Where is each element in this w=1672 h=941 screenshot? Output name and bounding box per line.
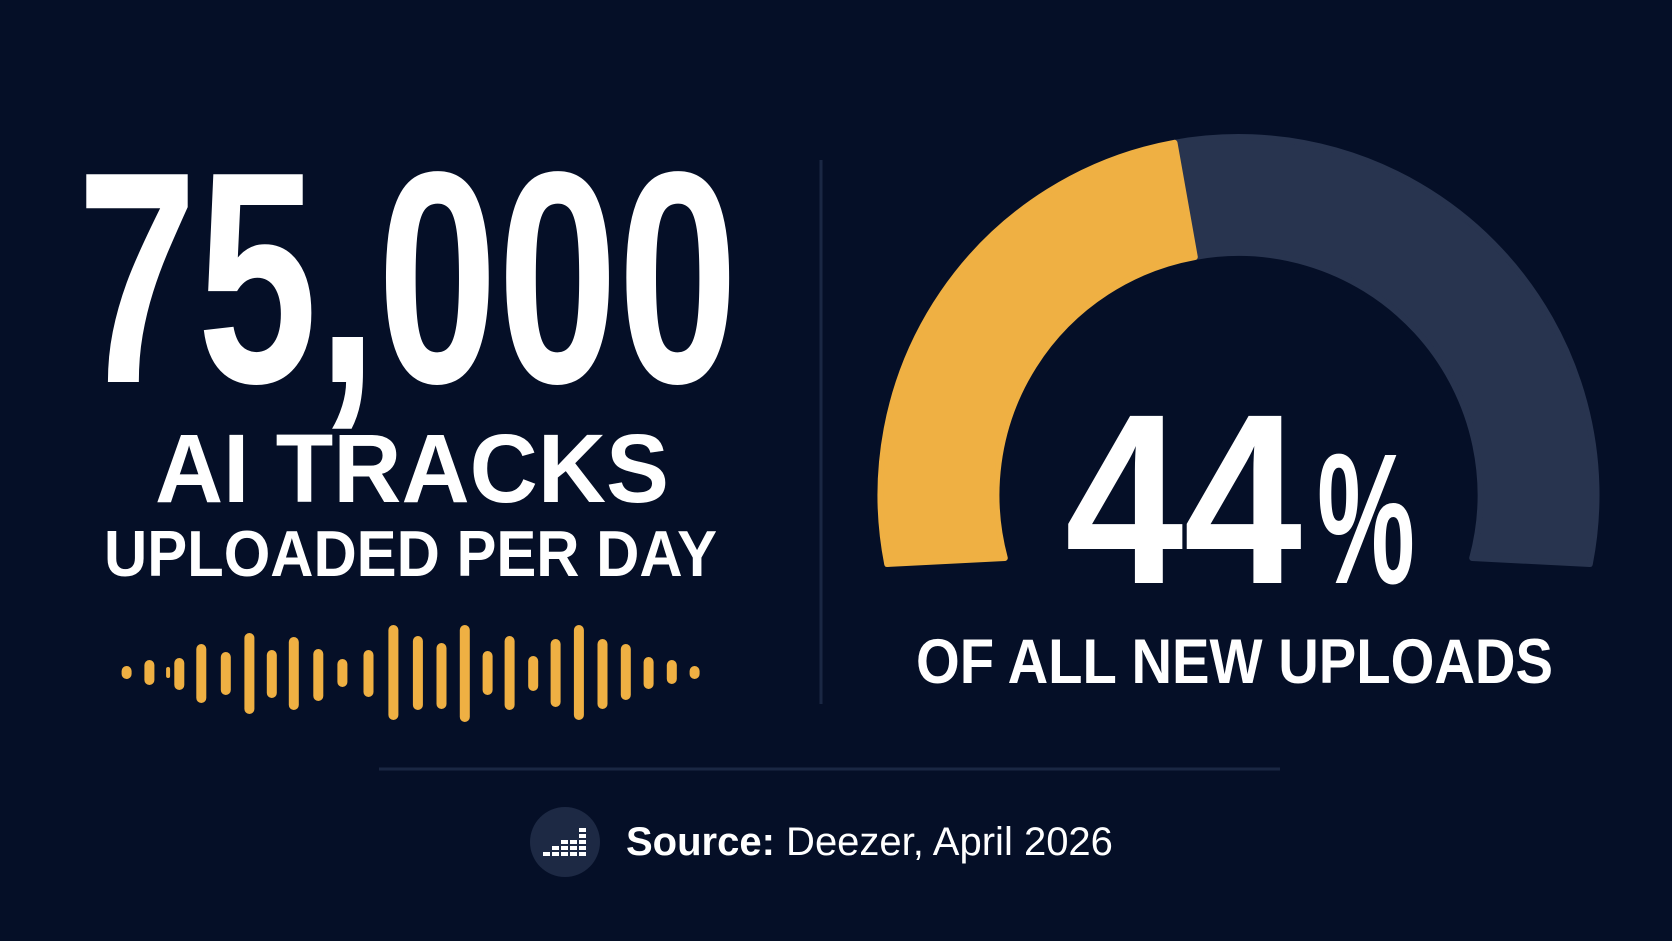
- heading: AI TRACKS: AI TRACKS: [155, 414, 669, 523]
- gauge chart: [880, 137, 1597, 564]
- big number: 44%: %: [1317, 416, 1415, 623]
- source text: Source: Deezer, April 2026: [626, 820, 1113, 864]
- big number: 44%: 44: [1065, 364, 1302, 635]
- subheading: uploaded per day: UPLOADED PER DAY: [104, 517, 717, 590]
- big number: 75,000: 75,000: [77, 109, 738, 446]
- subheading: of all new uploads: OF ALL NEW UPLOADS: [916, 627, 1553, 697]
- gauge: remaining track: [1174, 137, 1597, 564]
- waveform icon: [122, 625, 700, 722]
- icon: source equalizer badge: [530, 807, 600, 877]
- gauge: 44% filled: [880, 143, 1195, 564]
